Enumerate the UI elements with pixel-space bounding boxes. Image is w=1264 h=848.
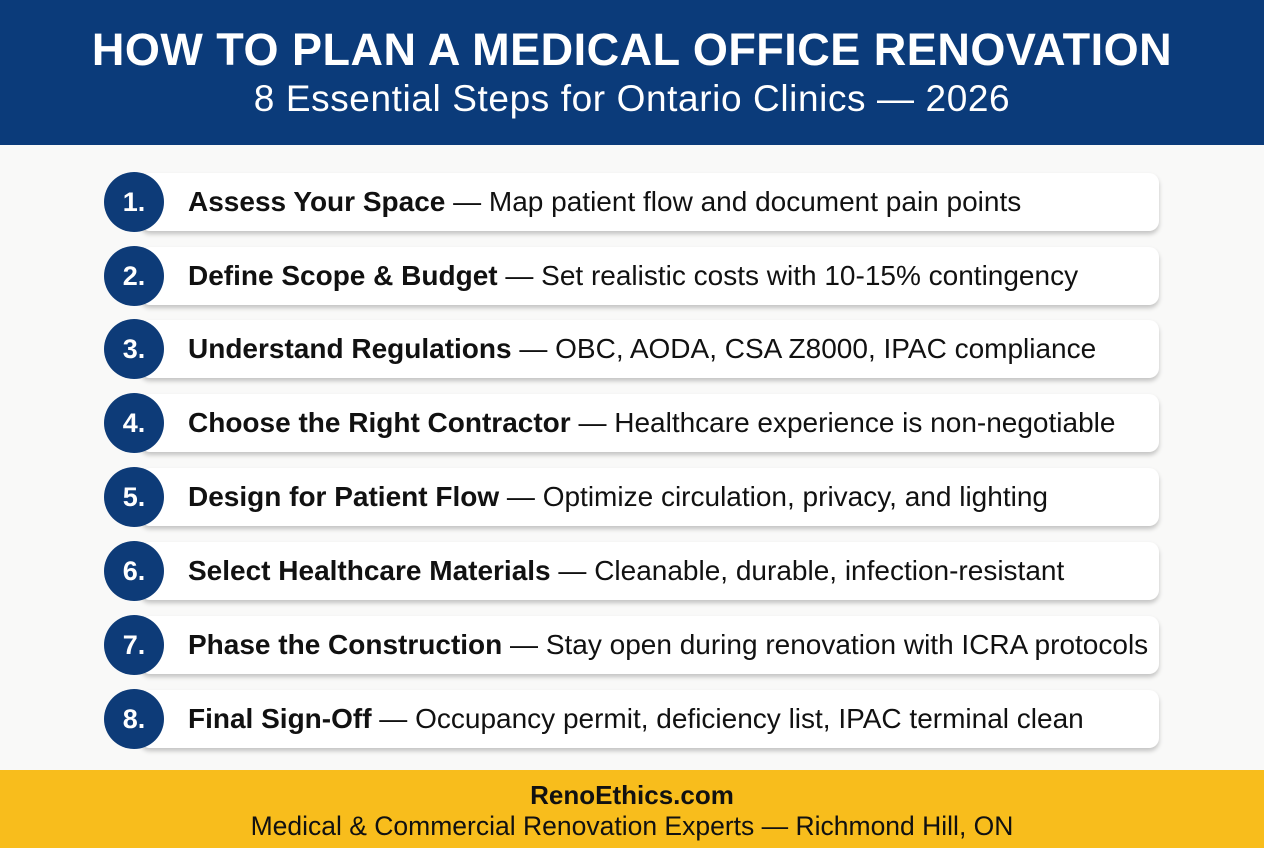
step 8	[104, 689, 1162, 754]
step 5: 5.	[123, 482, 145, 512]
step 8: Final Sign-Off — Occupancy permit, deficiency list, IPAC terminal clean	[188, 703, 1084, 734]
header banner	[0, 0, 1264, 145]
step 5: Design for Patient Flow — Optimize circulation, privacy, and lighting	[188, 481, 1048, 512]
step 2: Define Scope & Budget — Set realistic costs with 10-15% contingency	[188, 260, 1078, 291]
subtitle: 8 Essential Steps for Ontario Clinics — 2026	[254, 78, 1010, 119]
footer tagline: Medical & Commercial Renovation Experts — Richmond Hill, ON	[251, 811, 1013, 841]
step 8: 8.	[123, 704, 145, 734]
step 5	[104, 467, 1162, 532]
step 4	[104, 393, 1162, 458]
step 3	[104, 319, 1162, 384]
step 6: Select Healthcare Materials — Cleanable, durable, infection-resistant	[188, 555, 1064, 586]
step 2: 2.	[123, 261, 145, 291]
step 1	[104, 172, 1162, 236]
step 4: Choose the Right Contractor — Healthcare experience is non-negotiable	[188, 407, 1115, 438]
step 7: 7.	[123, 630, 145, 660]
step 3: 3.	[123, 334, 145, 364]
step 7	[104, 615, 1162, 680]
step 6	[104, 541, 1162, 606]
title: HOW TO PLAN A MEDICAL OFFICE RENOVATION	[92, 24, 1172, 75]
step 7: Phase the Construction — Stay open during renovation with ICRA protocols	[188, 629, 1148, 660]
footer website: RenoEthics.com	[530, 780, 734, 810]
step 1: 1.	[123, 187, 145, 217]
step 4: 4.	[123, 408, 145, 438]
step 6: 6.	[123, 556, 145, 586]
step 2	[104, 246, 1162, 310]
step 1: Assess Your Space — Map patient flow and document pain points	[188, 186, 1021, 217]
step 3: Understand Regulations — OBC, AODA, CSA Z8000, IPAC compliance	[188, 333, 1096, 364]
footer	[0, 770, 1264, 848]
